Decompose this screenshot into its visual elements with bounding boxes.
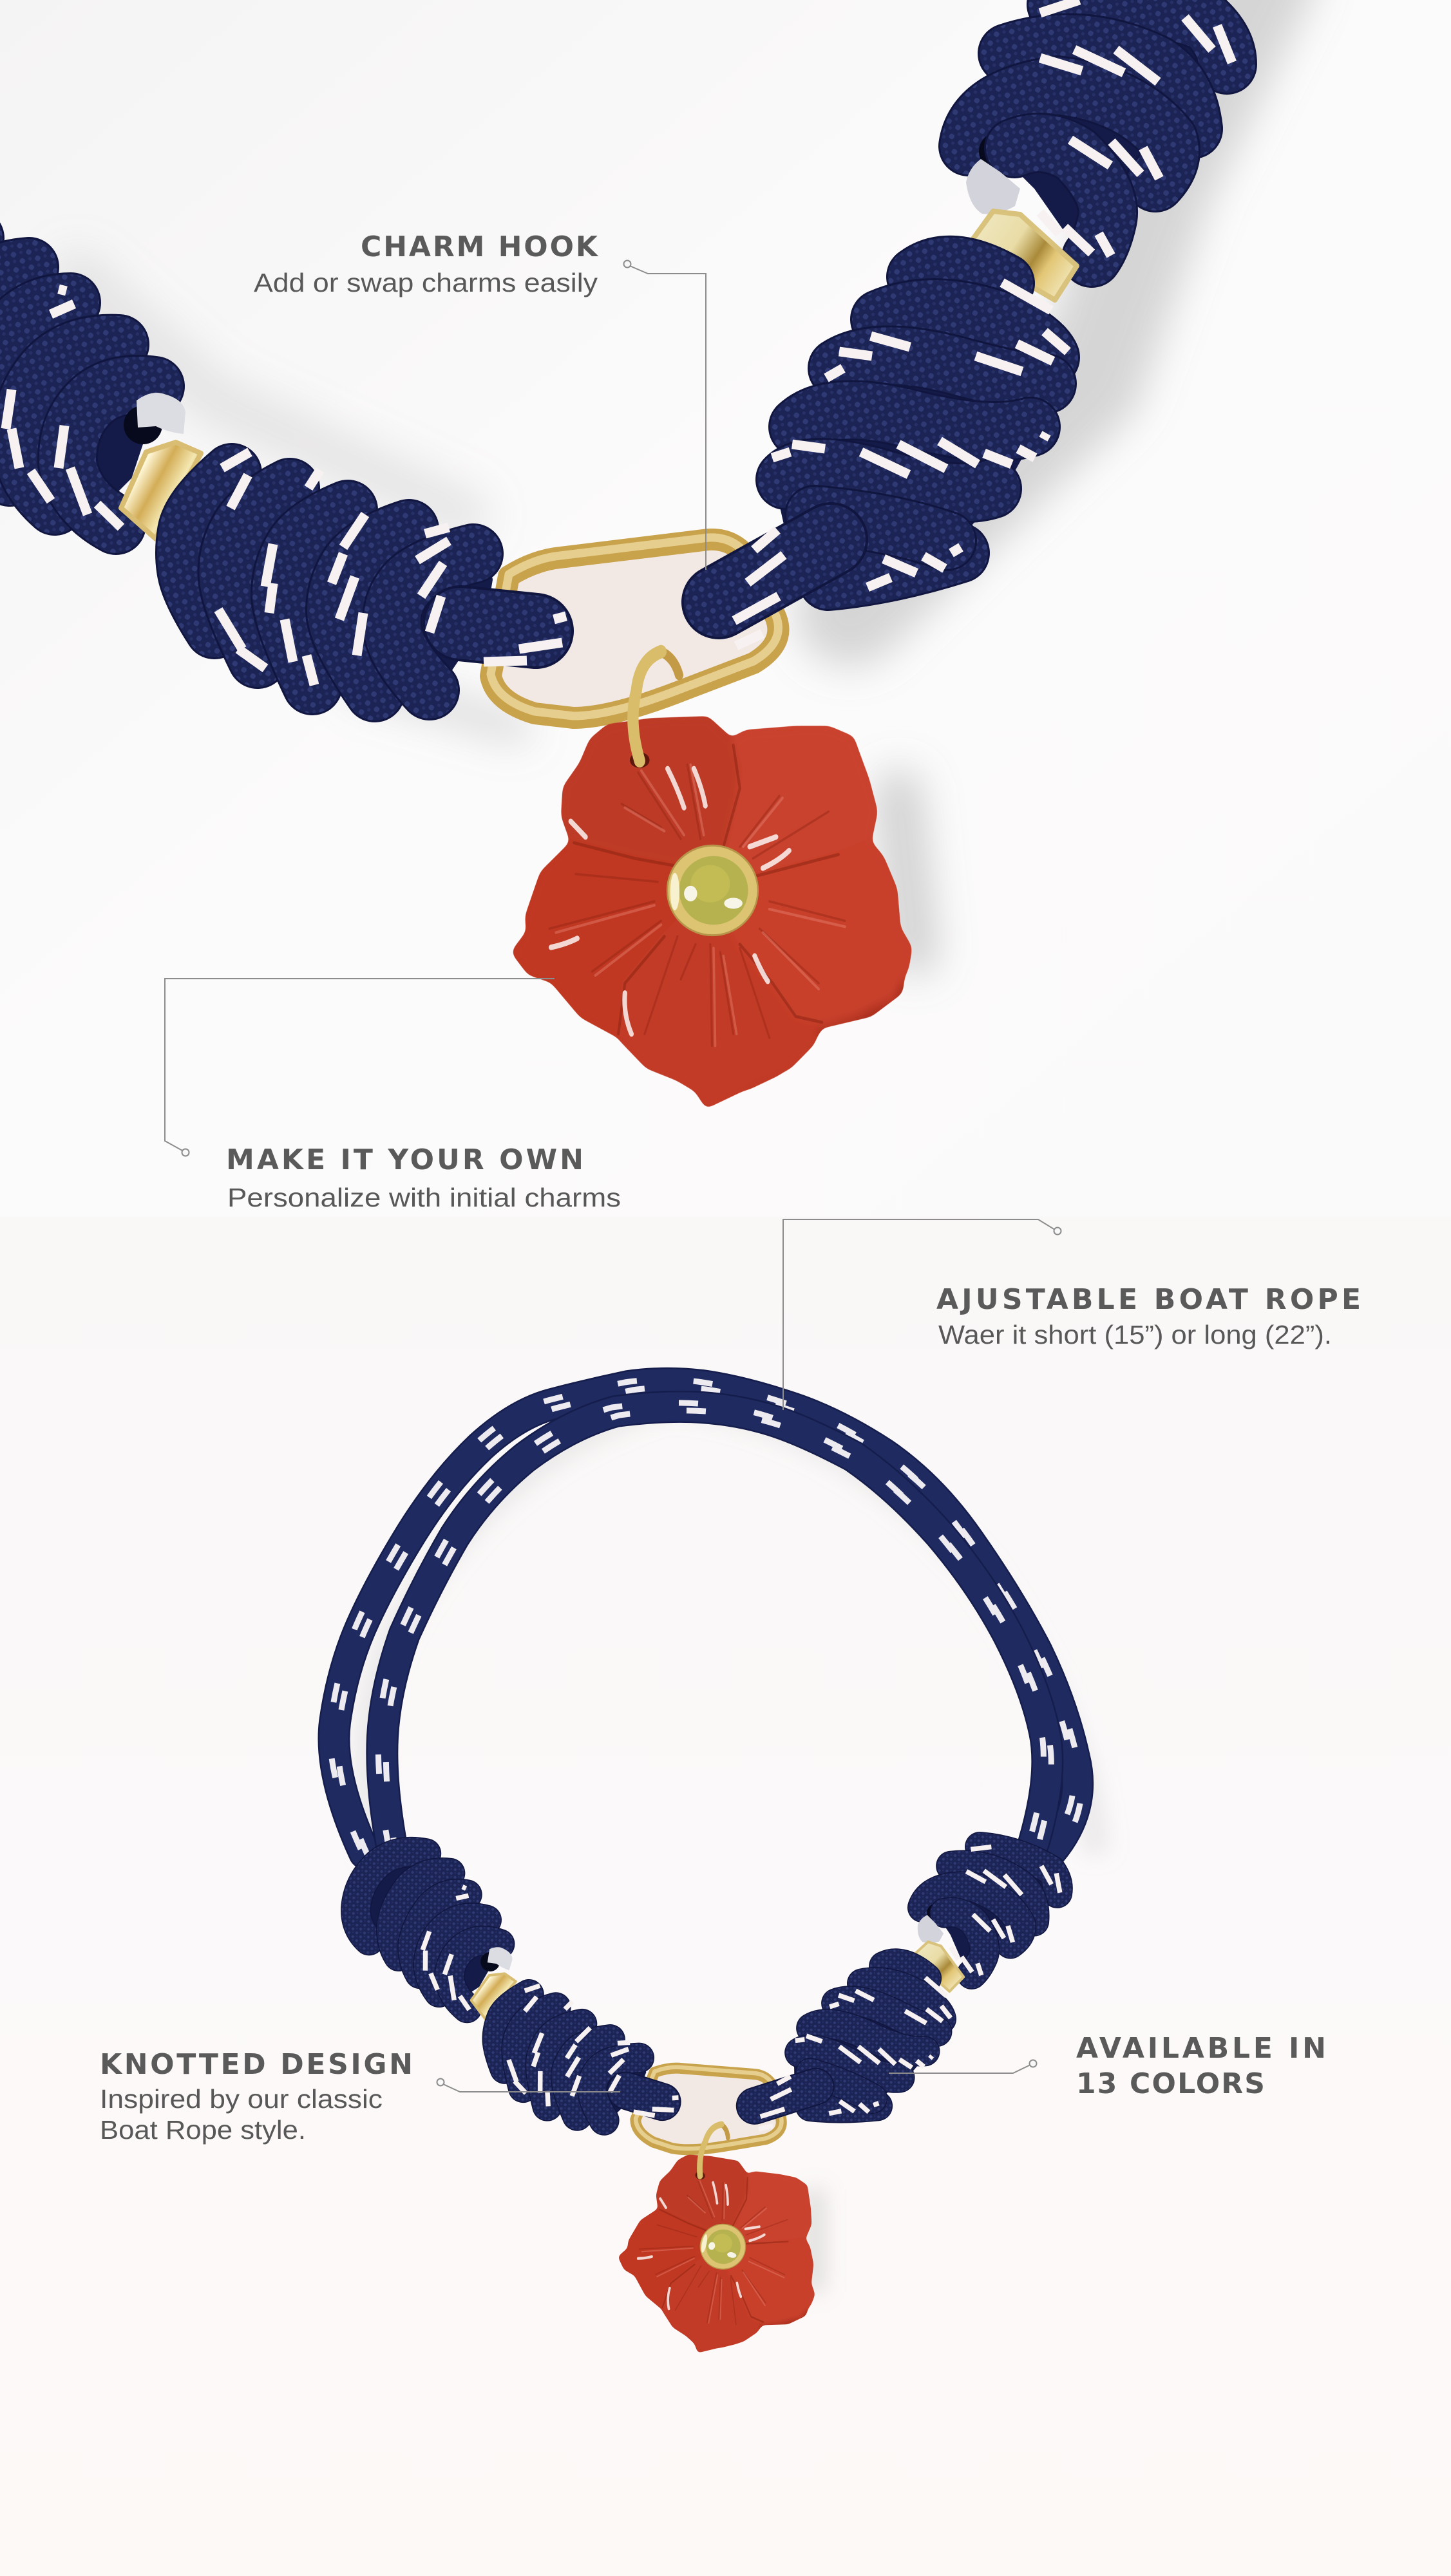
full necklace: knots, clasp and flower charm [283,1725,1066,2403]
outer strand [330,1380,1081,1857]
leader line: adjustable boat rope [783,1219,1061,1410]
inner strand [378,1403,1051,1857]
heading: charm hook: CHARM HOOK [361,230,599,263]
callout: knotted design [100,2048,620,2145]
heading: available in 13 colors [1076,2032,1326,2100]
heading: knotted design: KNOTTED DESIGN [100,2048,413,2081]
text: adjustable boat rope detail: Waer it short (15”) or long (22”). [938,1320,1332,1349]
flower charm [515,652,909,1104]
petals and back shade, rounded [515,720,909,1104]
leader line: knotted design [437,2078,620,2092]
gold bead left [121,442,201,539]
soft shadows under close-up necklace [77,0,1262,953]
text: knotted design detail [100,2084,383,2145]
heading: make it your own: MAKE IT YOUR OWN [226,1143,583,1176]
gold bead right [966,211,1077,300]
leader line: available in 13 colors [889,2060,1037,2073]
text: charm hook detail: Add or swap charms easily [254,268,598,297]
rope loop shadow [366,1400,1095,2292]
full necklace rope loop [330,1380,1095,2292]
knot: lower-left coil group, inner section with rope end [185,452,566,702]
diamond setting [667,845,758,935]
knot: upper-right coil group, outer section [966,0,1232,258]
leader line: charm hook [623,260,706,570]
knot: lower-left coil group, outer section [0,238,185,527]
heading: adjustable boat rope: AJUSTABLE BOAT ROPE [936,1283,1361,1316]
leader line: make it your own [165,979,555,1156]
text: make it your own detail: Personalize with initial charms [227,1183,621,1212]
glossy highlights [551,769,789,1034]
callout: charm hook [254,230,706,570]
text: knotted design detail: Inspired by our classic [100,2084,383,2114]
jump ring [630,752,650,768]
carved ridges [549,765,845,1046]
charm hook: gold carabiner clasp [491,538,778,718]
heading: available in 13 colors: 13 COLORS [1076,2067,1265,2100]
knot: upper-right coil group, inner section with rope end [719,264,1068,646]
petal seams [574,746,839,1034]
close-up necklace: knots, clasp and flower charm [0,0,1232,1104]
callout: available in 13 colors [889,2032,1326,2100]
text: knotted design detail: Boat Rope style. [100,2115,306,2145]
heading: available in 13 colors: AVAILABLE IN [1076,2032,1326,2065]
callout: make it your own [165,979,621,1212]
callout: adjustable boat rope [783,1219,1361,1410]
